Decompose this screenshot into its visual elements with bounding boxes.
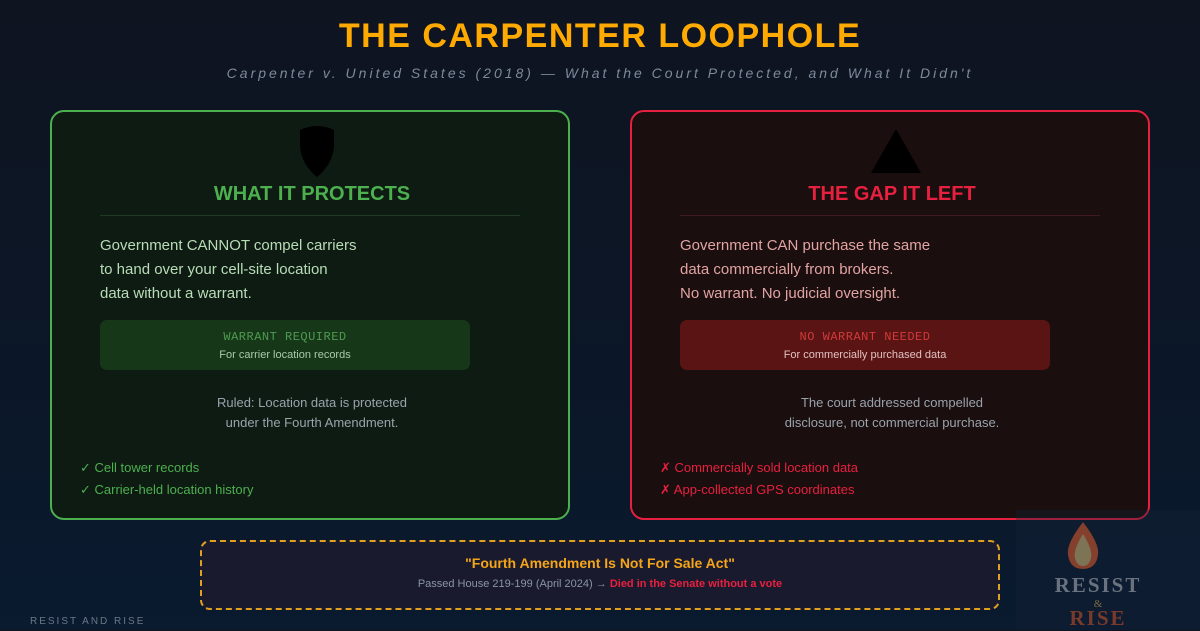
badge: warrant required: WARRANT REQUIRED bbox=[223, 330, 347, 344]
ruling text: under the Fourth Amendment. bbox=[226, 415, 398, 430]
body text bbox=[680, 237, 930, 302]
checklist: ✓ Cell tower records bbox=[80, 460, 199, 475]
checklist: ✓ Carrier-held location history bbox=[80, 482, 253, 497]
callout: act: "Fourth Amendment Is Not For Sale Act" bbox=[465, 555, 735, 571]
explanation text bbox=[785, 395, 999, 430]
list: ✗ App-collected GPS coordinates bbox=[660, 482, 854, 497]
panel: the gap it left bbox=[630, 110, 1150, 520]
ruling text: Ruled: Location data is protected bbox=[217, 395, 407, 410]
logo: resist & rise: & bbox=[1094, 598, 1102, 610]
body text: No warrant. No judicial oversight. bbox=[680, 285, 900, 302]
body text: data without a warrant. bbox=[100, 285, 252, 302]
badge: no warrant needed bbox=[680, 320, 1050, 370]
checklist bbox=[80, 460, 254, 497]
list: ✗ Commercially sold location data bbox=[660, 460, 858, 475]
callout: act: Passed House 219-199 (April 2024) → Died in the Senate without a vote bbox=[418, 578, 782, 590]
subtitle: Carpenter v. United States (2018) — What the Court Protected, and What It Didn't bbox=[227, 65, 973, 81]
title: THE CARPENTER LOOPHOLE bbox=[339, 17, 861, 55]
body text: to hand over your cell-site location bbox=[100, 261, 328, 278]
logo: resist & rise: RISE bbox=[1069, 606, 1127, 630]
logo: resist & rise bbox=[1016, 510, 1200, 630]
callout: act bbox=[200, 540, 1000, 610]
body text: Government CANNOT compel carriers bbox=[100, 237, 356, 254]
explanation text: disclosure, not commercial purchase. bbox=[785, 415, 999, 430]
body text bbox=[100, 237, 356, 302]
ruling text bbox=[217, 395, 407, 430]
body text: data commercially from brokers. bbox=[680, 261, 893, 278]
icon: flame bbox=[1068, 522, 1098, 569]
badge: no warrant needed: For commercially purchased data bbox=[784, 349, 946, 361]
icon: warning triangle bbox=[871, 130, 921, 173]
list bbox=[660, 460, 858, 497]
badge: warrant required bbox=[100, 320, 470, 370]
badge: warrant required: For carrier location records bbox=[219, 349, 351, 361]
body text: Government CAN purchase the same bbox=[680, 237, 930, 254]
logo: resist & rise: RESIST bbox=[1055, 573, 1141, 597]
panel: what it protects bbox=[50, 110, 570, 520]
footer brand: RESIST AND RISE bbox=[30, 616, 145, 627]
heading: THE GAP IT LEFT bbox=[808, 183, 976, 205]
explanation text: The court addressed compelled bbox=[801, 395, 983, 410]
icon: shield bbox=[300, 126, 334, 177]
heading: WHAT IT PROTECTS bbox=[214, 183, 410, 205]
badge: no warrant needed: NO WARRANT NEEDED bbox=[800, 330, 930, 344]
